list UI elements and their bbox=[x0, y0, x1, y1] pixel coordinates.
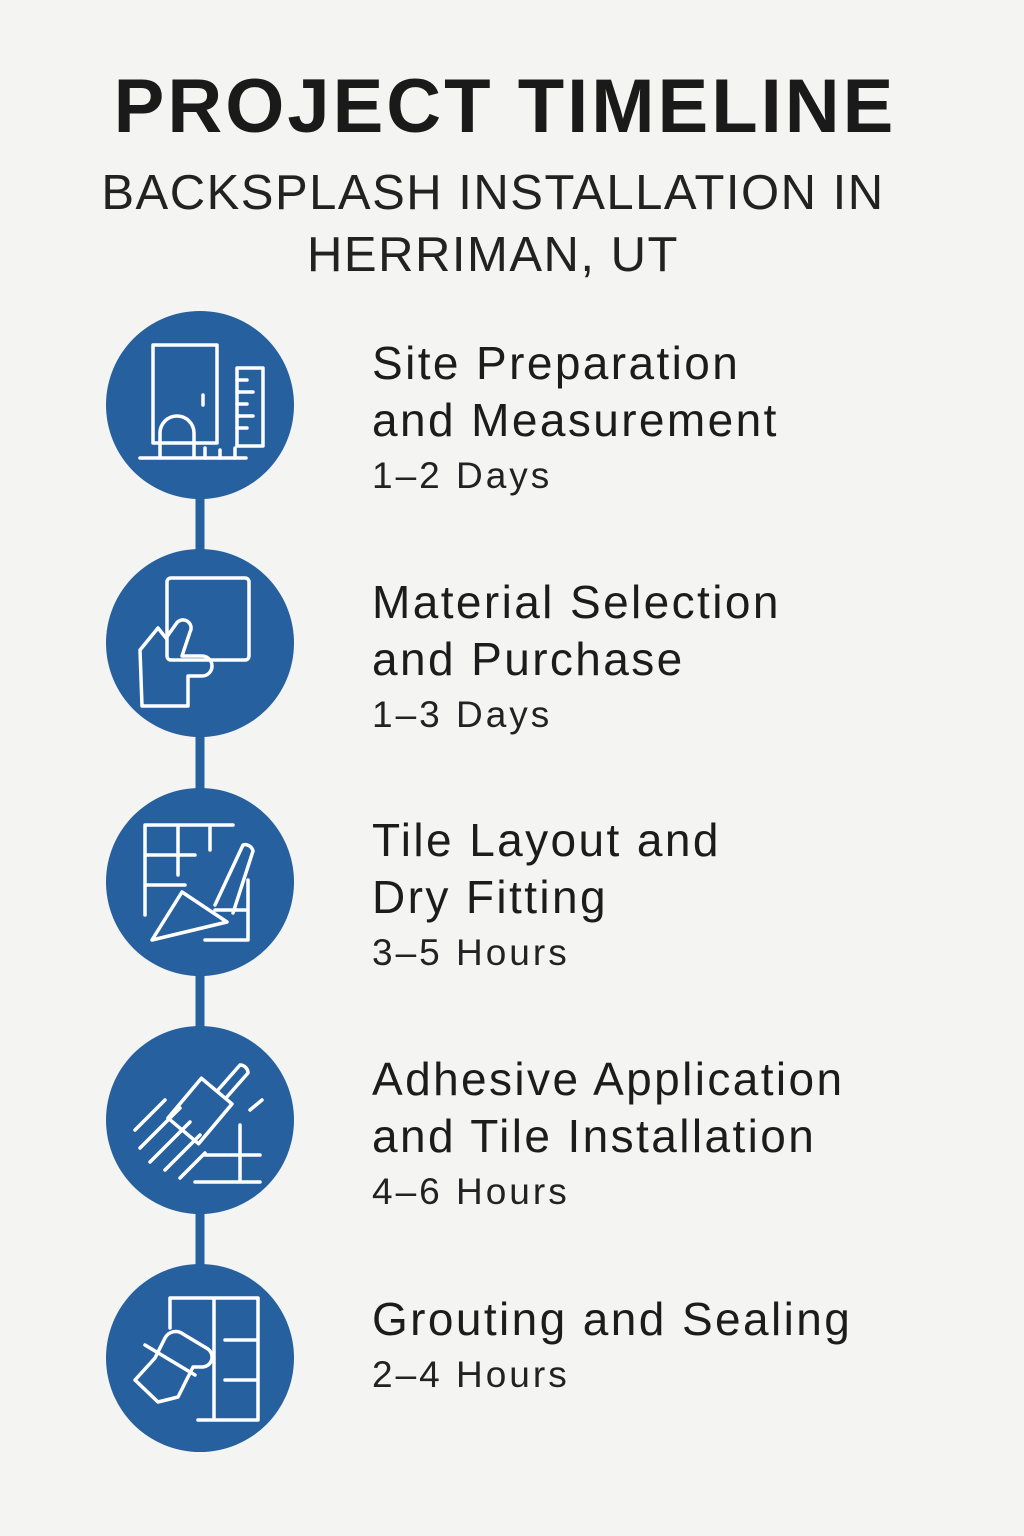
step 4 bbox=[372, 1053, 845, 1212]
subtitle: BACKSPLASH INSTALLATION IN bbox=[101, 166, 885, 220]
step 5: 2–4 Hours bbox=[372, 1354, 570, 1395]
step 5 bbox=[372, 1293, 852, 1395]
step 1 bbox=[372, 337, 779, 496]
icon: tile layout bbox=[106, 788, 294, 976]
step 2: Material Selection bbox=[372, 576, 781, 628]
step 2: 1–3 Days bbox=[372, 694, 552, 735]
title: PROJECT TIMELINE bbox=[114, 64, 896, 149]
step 4: Adhesive Application bbox=[372, 1053, 845, 1105]
step 4: and Tile Installation bbox=[372, 1110, 816, 1162]
step 5: Grouting and Sealing bbox=[372, 1293, 852, 1345]
step 1: and Measurement bbox=[372, 394, 779, 446]
step 3 bbox=[372, 814, 721, 973]
step 2: and Purchase bbox=[372, 633, 685, 685]
subtitle bbox=[101, 166, 885, 282]
icon: grouting bbox=[106, 1264, 294, 1452]
step 2 bbox=[372, 576, 781, 735]
icon: adhesive bbox=[106, 1026, 294, 1214]
subtitle: HERRIMAN, UT bbox=[307, 228, 679, 282]
step 3: 3–5 Hours bbox=[372, 932, 570, 973]
step 4: 4–6 Hours bbox=[372, 1171, 570, 1212]
step 1: Site Preparation bbox=[372, 337, 740, 389]
step 3: Dry Fitting bbox=[372, 871, 608, 923]
icon: material selection bbox=[106, 549, 294, 737]
step 3: Tile Layout and bbox=[372, 814, 721, 866]
icon: site preparation bbox=[106, 311, 294, 499]
step 1: 1–2 Days bbox=[372, 455, 552, 496]
timeline icons bbox=[106, 311, 294, 1452]
